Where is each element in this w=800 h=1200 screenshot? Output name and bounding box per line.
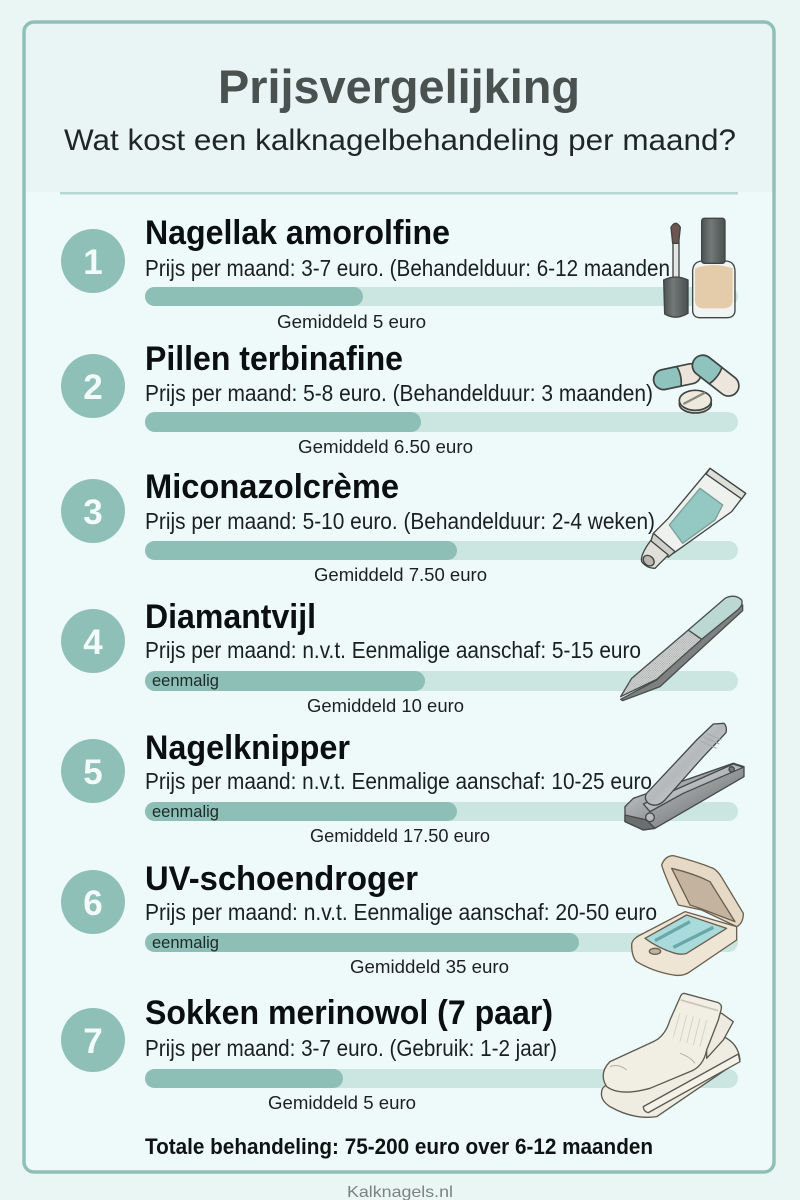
row 7: Sokken merinowol: Gemiddeld 5 euro [268,1092,416,1113]
row 5: Nagelknipper: eenmalig [152,802,219,821]
row 3: Miconazolcrème: Prijs per maand: 5-10 euro. (Behandelduur: 2-4 weken) [145,508,655,534]
row 5: Nagelknipper: Nagelknipper [145,729,350,767]
row 6: UV-schoendroger: Gemiddeld 35 euro [350,956,509,977]
subtitle: Wat kost een kalknagelbehandeling per maand? [64,124,736,157]
row 2: Pillen terbinafine: Gemiddeld 6.50 euro [298,436,473,457]
row 3: Miconazolcrème [61,468,738,585]
icon: pills [652,351,743,413]
row 7: Sokken merinowol [61,994,738,1113]
row 1: Nagellak amorolfine: Nagellak amorolfine [145,214,450,252]
icon: socks [601,993,740,1117]
row 7: Sokken merinowol: Prijs per maand: 3-7 euro. (Gebruik: 1-2 jaar) [145,1035,557,1061]
row 3: Miconazolcrème: 3 [83,493,103,532]
row 4: Diamantvijl: eenmalig [152,671,219,690]
row 5: Nagelknipper: 5 [83,753,103,792]
icon: cream tube [641,468,746,568]
row 6: UV-schoendroger [61,860,738,977]
row 1: Nagellak amorolfine: Prijs per maand: 3-7 euro. (Behandelduur: 6-12 maanden [145,255,670,281]
title: Prijsvergelijking [218,60,580,113]
row 5: Nagelknipper: Gemiddeld 17.50 euro [310,825,490,846]
row 2: Pillen terbinafine: Pillen terbinafine [145,340,403,378]
row 2: Pillen terbinafine: Prijs per maand: 5-8 euro. (Behandelduur: 3 maanden) [145,380,653,406]
row 6: UV-schoendroger: eenmalig [152,933,219,952]
row 4: Diamantvijl [61,598,738,716]
row 4: Diamantvijl: Prijs per maand: n.v.t. Eenmalige aanschaf: 5-15 euro [145,637,641,663]
row 5: Nagelknipper [61,729,738,846]
row 7: Sokken merinowol: Sokken merinowol (7 paar) [145,994,553,1032]
row 2: Pillen terbinafine [61,340,738,457]
icon: nail clipper [625,723,744,830]
row 2: Pillen terbinafine: 2 [83,368,103,407]
total line: Totale behandeling: 75-200 euro over 6-12 maanden [145,1134,653,1159]
row 1: Nagellak amorolfine [61,214,738,332]
icon: diamond nail file [621,596,743,701]
row 1: Nagellak amorolfine: Gemiddeld 5 euro [277,311,426,332]
row 3: Miconazolcrème: Gemiddeld 7.50 euro [314,564,487,585]
row 4: Diamantvijl: Gemiddeld 10 euro [307,695,464,716]
row 4: Diamantvijl: Diamantvijl [145,598,316,636]
row 3: Miconazolcrème: Miconazolcrème [145,468,399,506]
row 5: Nagelknipper: Prijs per maand: n.v.t. Eenmalige aanschaf: 10-25 euro [145,768,652,794]
row 6: UV-schoendroger: Prijs per maand: n.v.t. Eenmalige aanschaf: 20-50 euro [145,899,657,925]
row 4: Diamantvijl: 4 [83,623,103,662]
row 6: UV-schoendroger: 6 [83,884,103,923]
row 1: Nagellak amorolfine: 1 [83,243,103,282]
row 7: Sokken merinowol: 7 [83,1022,103,1061]
icon: UV shoe dryer [632,856,743,975]
row 6: UV-schoendroger: UV-schoendroger [145,860,418,898]
icon: nail polish [664,218,735,318]
